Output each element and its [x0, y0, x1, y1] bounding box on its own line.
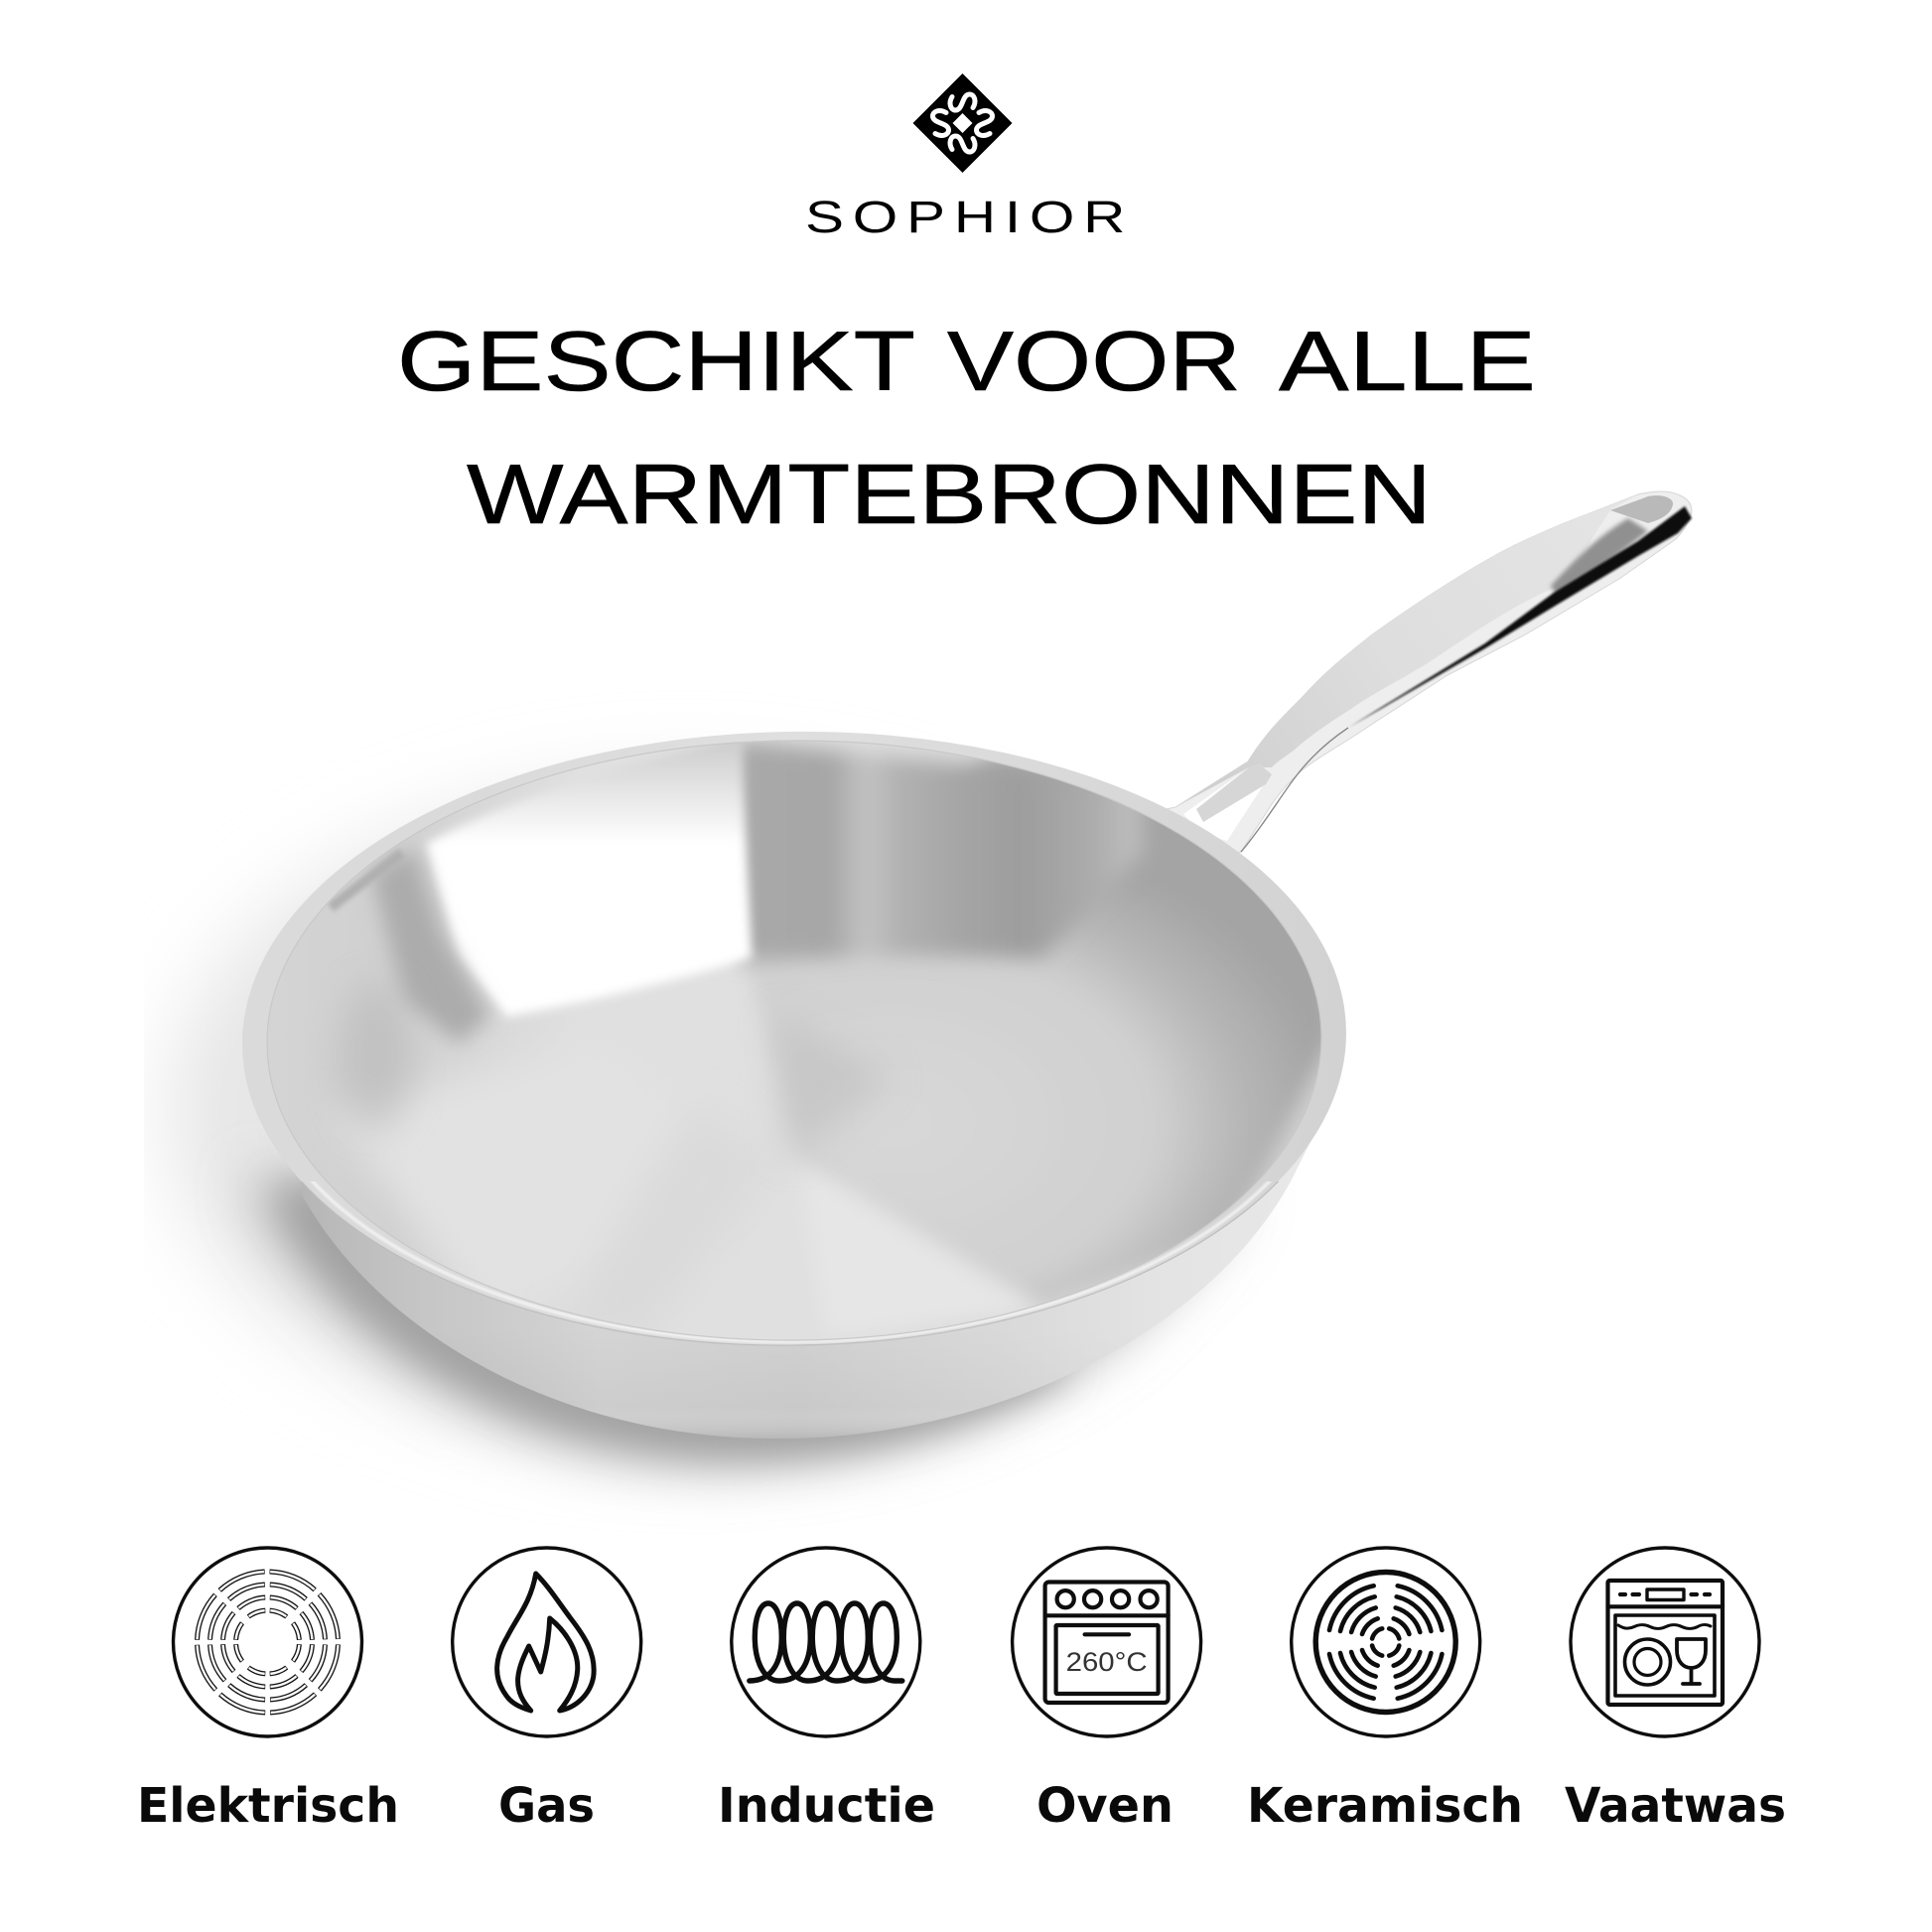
interior: lower floor light: [345, 1084, 510, 1291]
title: [397, 315, 1536, 542]
icon: vaatwas dishwasher: [1571, 1548, 1759, 1736]
handle shaded zone: [1551, 518, 1648, 600]
infographic canvas: [141, 73, 1784, 1823]
labels row: Gas: [498, 1778, 595, 1834]
pan interior: [300, 741, 1320, 1322]
title: WARMTEBRONNEN: [467, 448, 1432, 542]
labels row: Elektrisch: [137, 1778, 399, 1834]
icon: keramisch hob: [1292, 1548, 1480, 1736]
logo: [805, 73, 1125, 242]
interior: bright wedge: [828, 1201, 1021, 1320]
interior: left wall shade: [340, 983, 411, 1132]
labels row: Oven: [1036, 1778, 1173, 1834]
handle top surface: [1175, 494, 1638, 807]
icon: oven 260 degrees: 260°C: [1066, 1647, 1148, 1677]
labels row: Inductie: [718, 1778, 935, 1834]
pan shadow: [169, 784, 1241, 1464]
interior: white reflection: [426, 735, 752, 1017]
labels row: [137, 1778, 1786, 1834]
icon: diamond emblem: [913, 73, 1013, 173]
pan rim: [238, 724, 1350, 1353]
interior: grey wedge near centre: [778, 1036, 870, 1143]
handle dark reflection: [1348, 506, 1692, 728]
interior: dark upper wall: [737, 740, 1142, 961]
labels row: Vaatwas: [1565, 1778, 1786, 1834]
icon: oven 260 degrees: [1013, 1548, 1201, 1736]
pan body: [298, 1122, 1320, 1439]
title: ALLE: [1279, 315, 1536, 409]
interior: upper right region: [746, 755, 1335, 1306]
inner rim edge: [265, 737, 1323, 1344]
labels row: Keramisch: [1247, 1778, 1523, 1834]
photo: stainless steel frying pan: [169, 491, 1692, 1464]
brand name: SOPHIOR: [805, 193, 1125, 242]
title: GESCHIKT: [397, 315, 915, 409]
handle fork opening: [1183, 764, 1272, 841]
rim lip lines: [302, 1181, 1279, 1346]
icons row: [173, 1548, 1759, 1736]
handle hanging hole: [1610, 495, 1673, 523]
interior: dark left streak: [372, 848, 490, 1043]
icon: inductie coil: [732, 1548, 920, 1736]
handle thin reflection line: [1241, 728, 1348, 852]
handle: [1142, 491, 1692, 874]
title: VOOR: [947, 315, 1241, 409]
icon: elektrisch: [173, 1548, 361, 1736]
icon: gas flame: [453, 1548, 641, 1736]
